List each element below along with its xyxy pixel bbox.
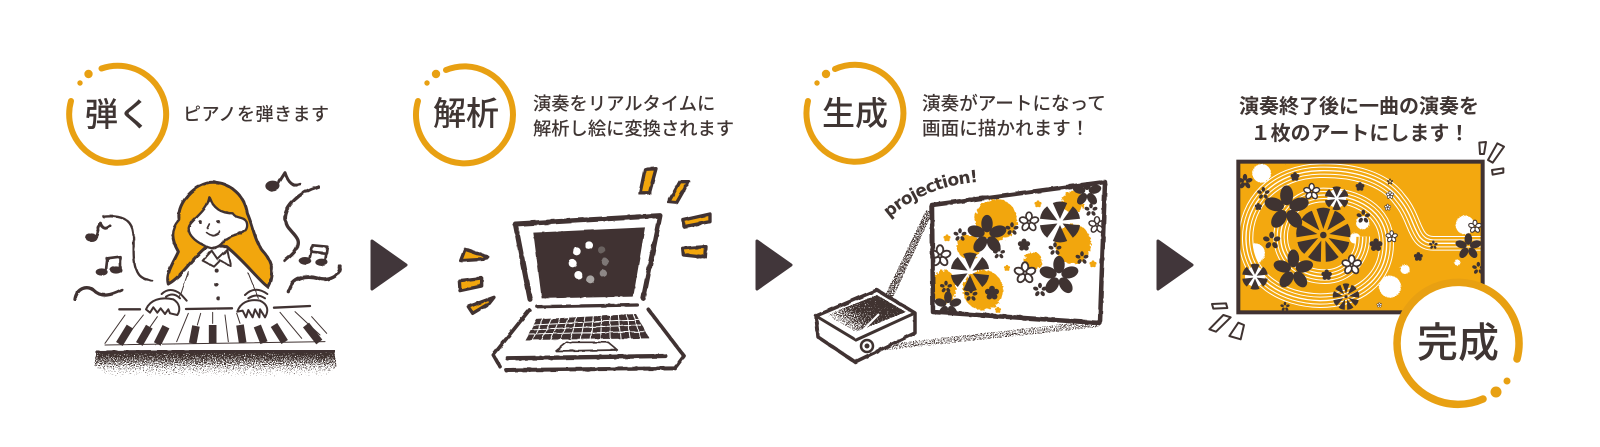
arrow 2	[757, 241, 791, 289]
badge: 解析: 解析	[433, 95, 499, 132]
text: step 3 description: 演奏がアートになって	[922, 93, 1106, 114]
artwork	[1237, 162, 1485, 312]
illustration: keyboard	[94, 290, 337, 377]
text: step 4 description: 演奏終了後に一曲の演奏を	[1239, 95, 1479, 118]
notes and squiggles	[86, 233, 98, 242]
blouse	[203, 250, 231, 267]
panel: step 1 play	[69, 66, 340, 377]
text: step 4 description: １枚のアートにします！	[1251, 122, 1469, 145]
panel: step 4 complete	[1209, 95, 1519, 404]
sparkles top right	[1479, 142, 1504, 175]
illustration: projector	[816, 290, 915, 362]
projection beams	[876, 210, 1100, 351]
piano shadow base	[94, 350, 337, 377]
panel: step 2 analyze	[416, 66, 734, 370]
rays	[459, 169, 710, 313]
arrow 3	[1158, 241, 1192, 289]
badge: 弾く: 弾く	[85, 96, 151, 133]
text: step 2 description: 解析し絵に変換されます	[533, 118, 734, 139]
face	[189, 197, 247, 248]
text: step 2 description: 演奏をリアルタイムに	[533, 93, 715, 114]
sparkles bottom left	[1209, 303, 1244, 339]
badge: 生成: 生成	[822, 95, 888, 132]
badge: 弾く	[69, 66, 166, 163]
text: step 1 description: ピアノを弾きます	[183, 104, 329, 124]
arrow 1	[372, 241, 406, 289]
badge: 完成: 完成	[1417, 320, 1499, 366]
label: projection: projection!	[884, 170, 976, 220]
infographic: four steps	[66, 62, 1523, 408]
projected screen with flowers	[929, 177, 1106, 323]
text: step 3 description: 画面に描かれます！	[922, 118, 1089, 139]
hair	[168, 182, 272, 287]
illustration: girl playing piano	[75, 173, 340, 300]
badge: 完成	[1397, 282, 1519, 404]
right hand	[237, 300, 267, 317]
panel: step 3 generate	[803, 62, 1108, 364]
illustration: laptop	[459, 169, 710, 370]
left hand	[146, 298, 179, 315]
badge: 解析	[416, 66, 513, 163]
badge: 生成	[806, 65, 903, 162]
